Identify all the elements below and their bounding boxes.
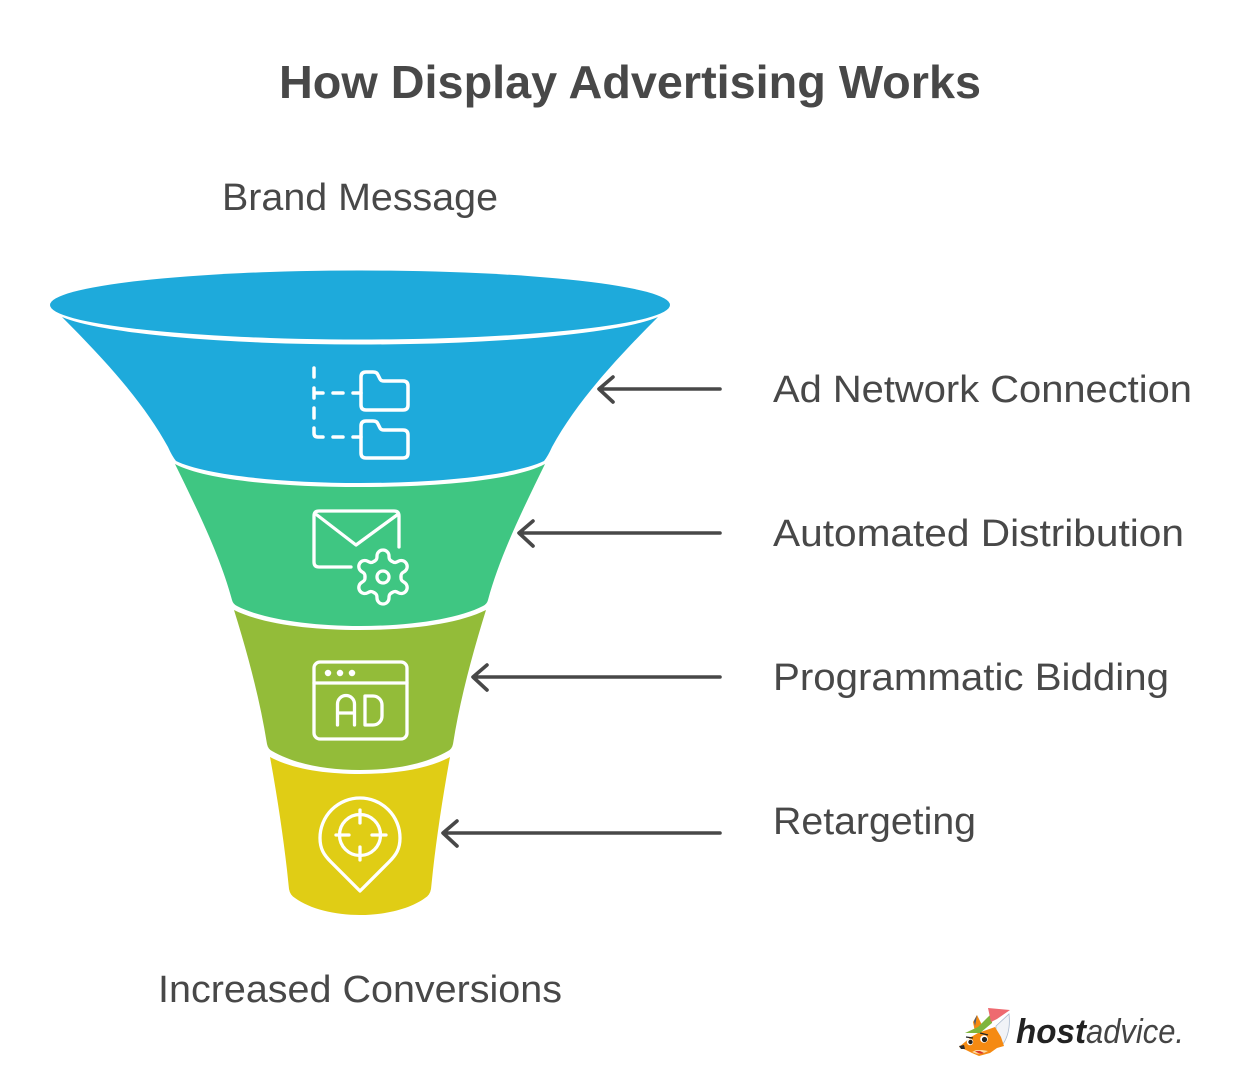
funnel opening ellipse <box>50 270 670 340</box>
logo: hostadvice <box>959 1008 1184 1056</box>
icon: fox mascot <box>959 1008 1010 1056</box>
arrow: programmatic bidding <box>473 665 720 690</box>
label: Programmatic Bidding: Programmatic Bidding <box>773 657 1169 699</box>
title: How Display Advertising Works <box>279 56 981 108</box>
funnel segment 3: olive <box>234 610 486 770</box>
arrow: automated distribution <box>519 521 720 546</box>
label: Retargeting: Retargeting <box>773 801 976 843</box>
icon: envelope with gear <box>314 511 411 604</box>
funnel <box>50 270 670 915</box>
bottom label: Increased Conversions: Increased Conversions <box>158 969 562 1011</box>
label: Automated Distribution: Automated Distribution <box>773 513 1184 555</box>
icon: location target pin <box>320 798 400 891</box>
wordmark: host: host <box>1016 1013 1088 1051</box>
funnel segment 4: yellow <box>270 757 450 915</box>
funnel segment 2: green <box>175 464 545 626</box>
funnel segment 1: blue <box>62 317 658 483</box>
label: Ad Network Connection: Ad Network Connection <box>773 369 1192 411</box>
icon: folder tree <box>314 368 408 458</box>
icon: ad browser window <box>314 662 407 739</box>
arrow: retargeting <box>443 821 720 846</box>
top label: Brand Message: Brand Message <box>222 177 498 219</box>
wordmark: advice: advice. <box>1086 1013 1184 1051</box>
arrow: ad network connection <box>599 377 720 402</box>
